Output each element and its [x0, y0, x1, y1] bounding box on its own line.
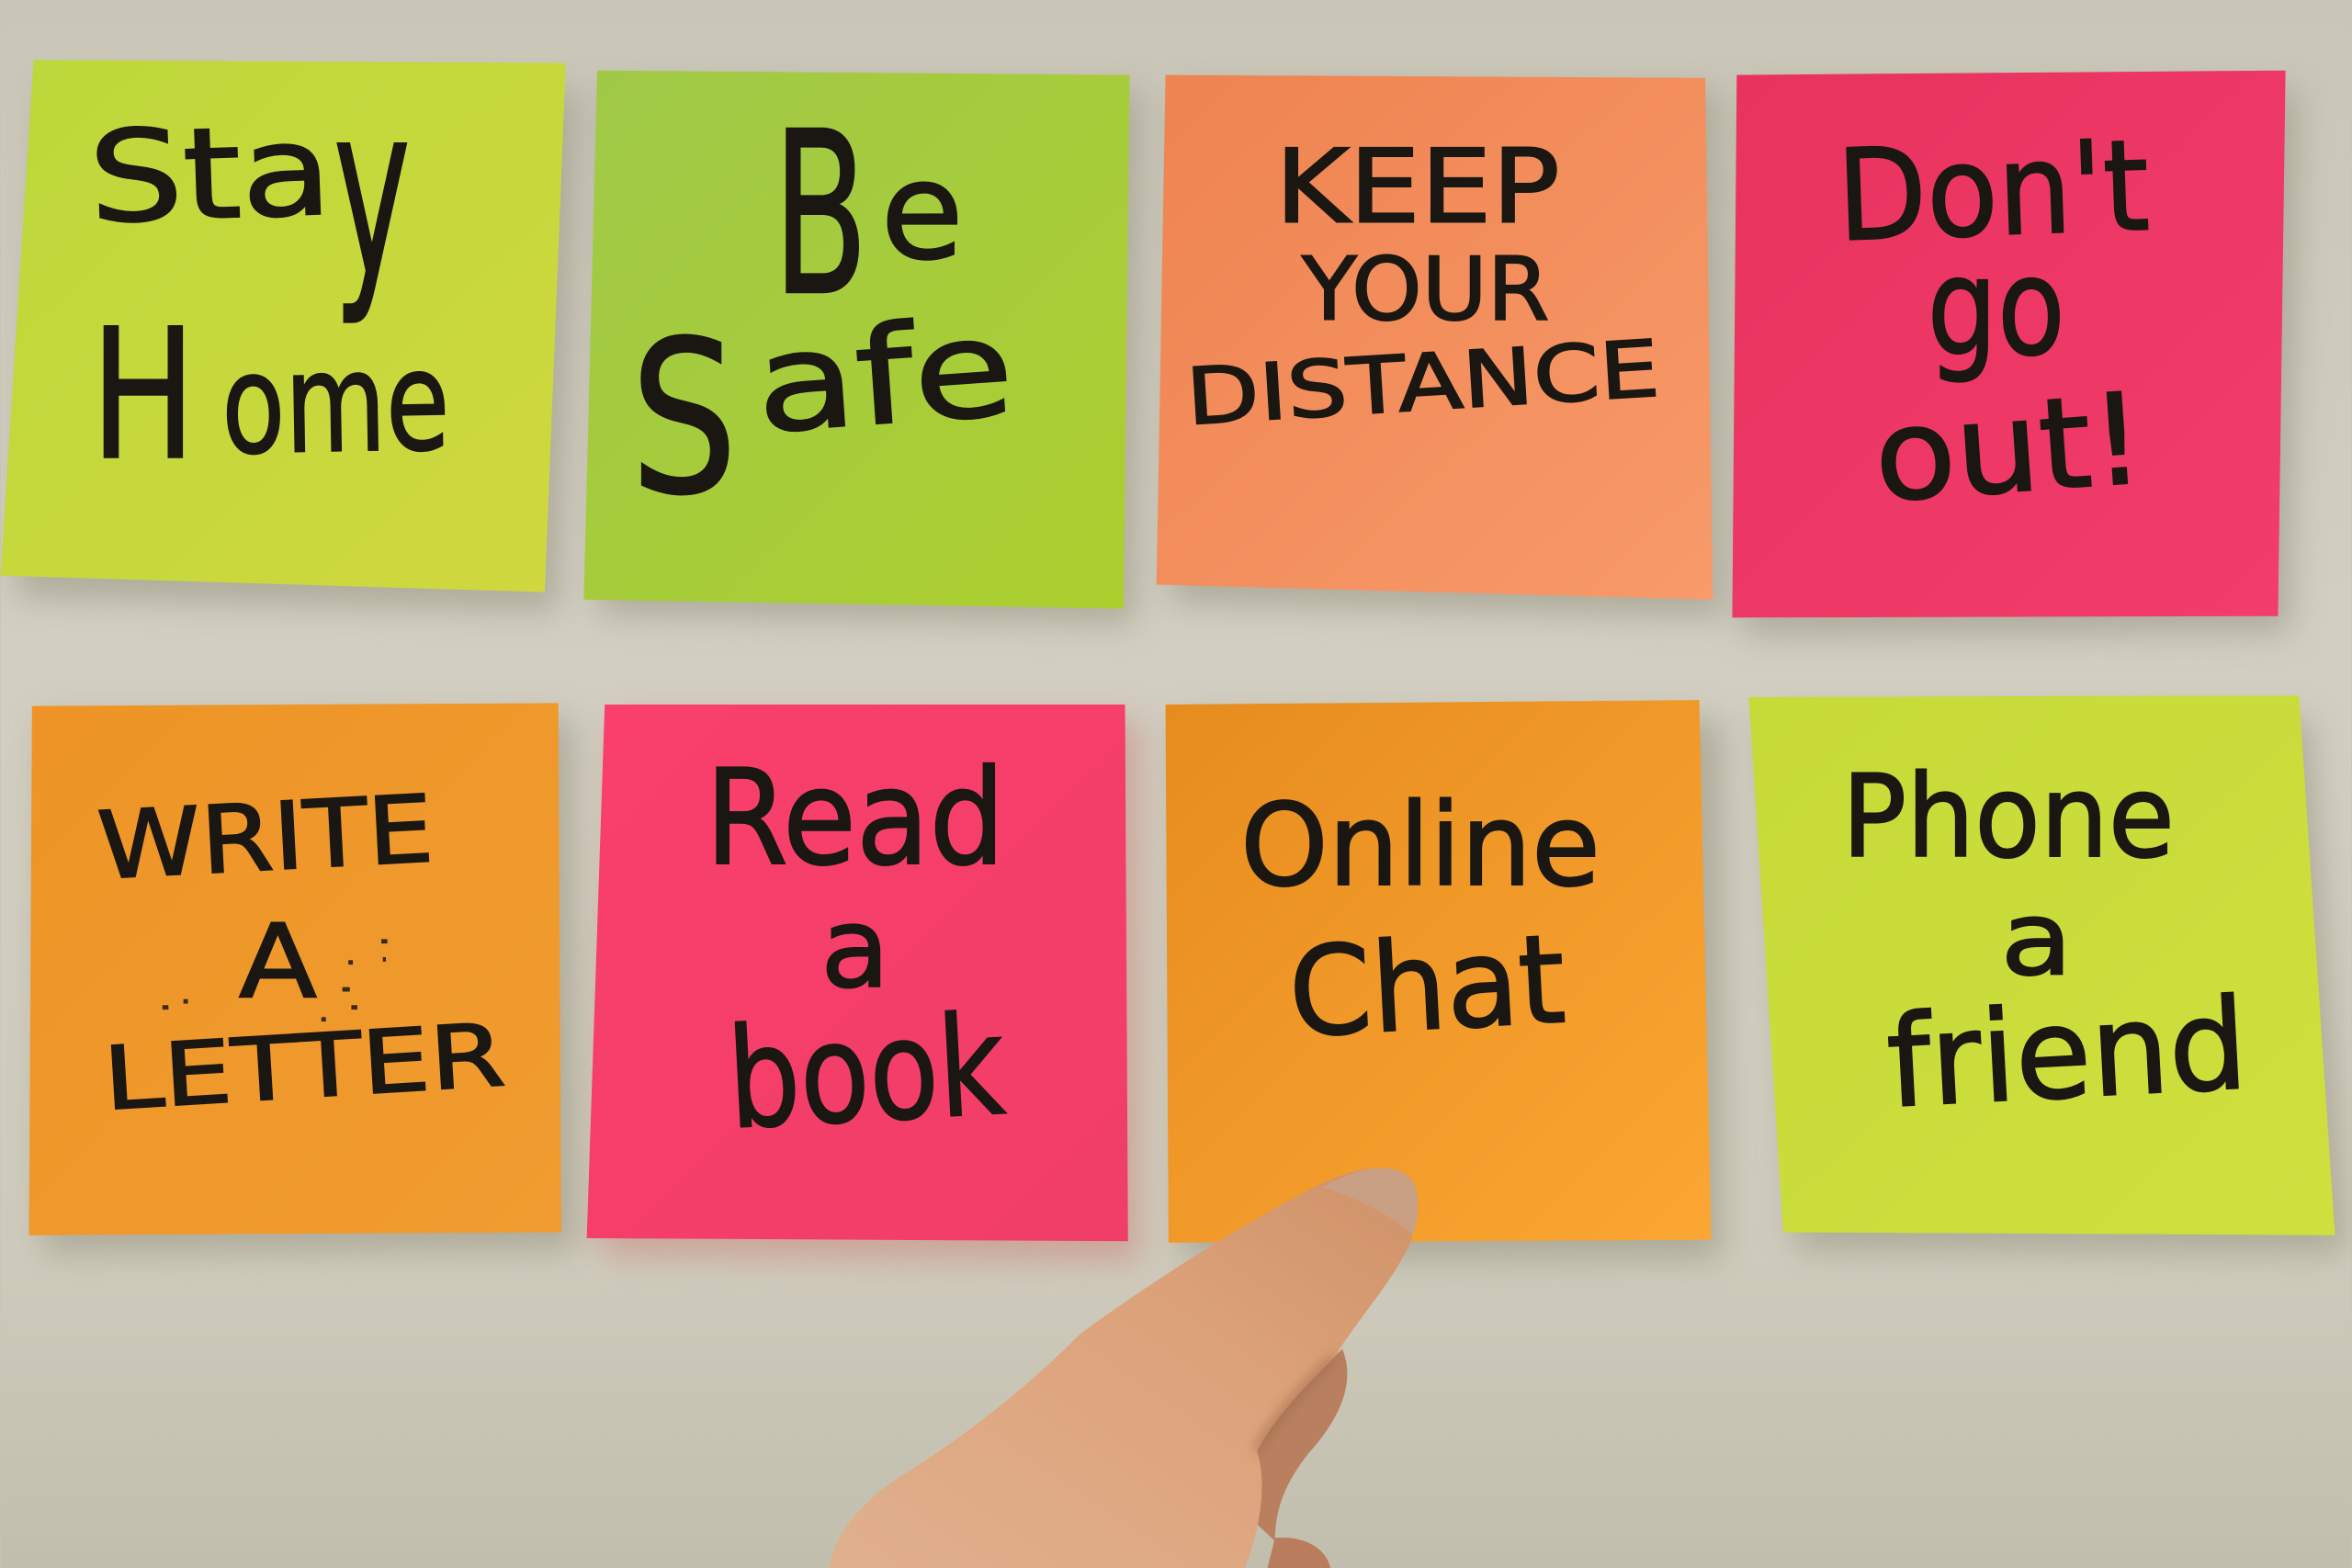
- note: Keep your distance: KEEP: [1275, 129, 1560, 247]
- note: Online chat: [1166, 700, 1712, 1243]
- note: Write a letter: WRITE: [95, 774, 436, 900]
- note: Read a book: book: [724, 987, 1008, 1160]
- note: Write a letter: LETTER: [100, 1005, 508, 1131]
- note: Read a book: Read: [706, 741, 1005, 895]
- note: Stay Home: Sta: [86, 97, 334, 253]
- note: Don't go out!: out!: [1870, 367, 2149, 531]
- note: Stay Home: H: [90, 291, 196, 501]
- note: Phone a friend: [1748, 695, 2335, 1235]
- note shadows: [16, 90, 2347, 1262]
- note: Phone a friend: a: [2001, 881, 2073, 999]
- note: Be Safe: afe: [751, 289, 1019, 464]
- icon: hand pointing at the online chat note: [830, 1168, 1418, 1568]
- note: Read a book: [587, 705, 1128, 1241]
- note: Don't go out!: [1732, 71, 2286, 617]
- note: Don't go out!: Don't: [1835, 113, 2152, 270]
- note: Keep your distance: DISTANCE: [1183, 323, 1662, 444]
- note: Online chat: Chat: [1285, 908, 1568, 1066]
- note: Online chat: Online: [1240, 780, 1600, 912]
- note: Phone a friend: friend: [1883, 972, 2251, 1136]
- note: Write a letter: [29, 703, 561, 1235]
- note: Stay Home: [1, 54, 566, 592]
- note: Be Safe: e: [881, 133, 964, 290]
- note: Be Safe: B: [773, 85, 868, 346]
- note: Keep your distance: YOUR: [1301, 240, 1549, 341]
- note: Stay Home: y: [334, 54, 411, 330]
- note: Write a letter: A: [239, 903, 317, 1021]
- note: Read a book: a: [820, 885, 889, 1013]
- note: Be Safe: S: [630, 297, 738, 542]
- note: Stay Home: ome: [220, 322, 451, 486]
- note: Be Safe: [583, 71, 1129, 609]
- note: Don't go out!: go: [1928, 229, 2065, 386]
- note: Keep your distance: [1157, 75, 1713, 600]
- note: Phone a friend: Phone: [1842, 751, 2175, 884]
